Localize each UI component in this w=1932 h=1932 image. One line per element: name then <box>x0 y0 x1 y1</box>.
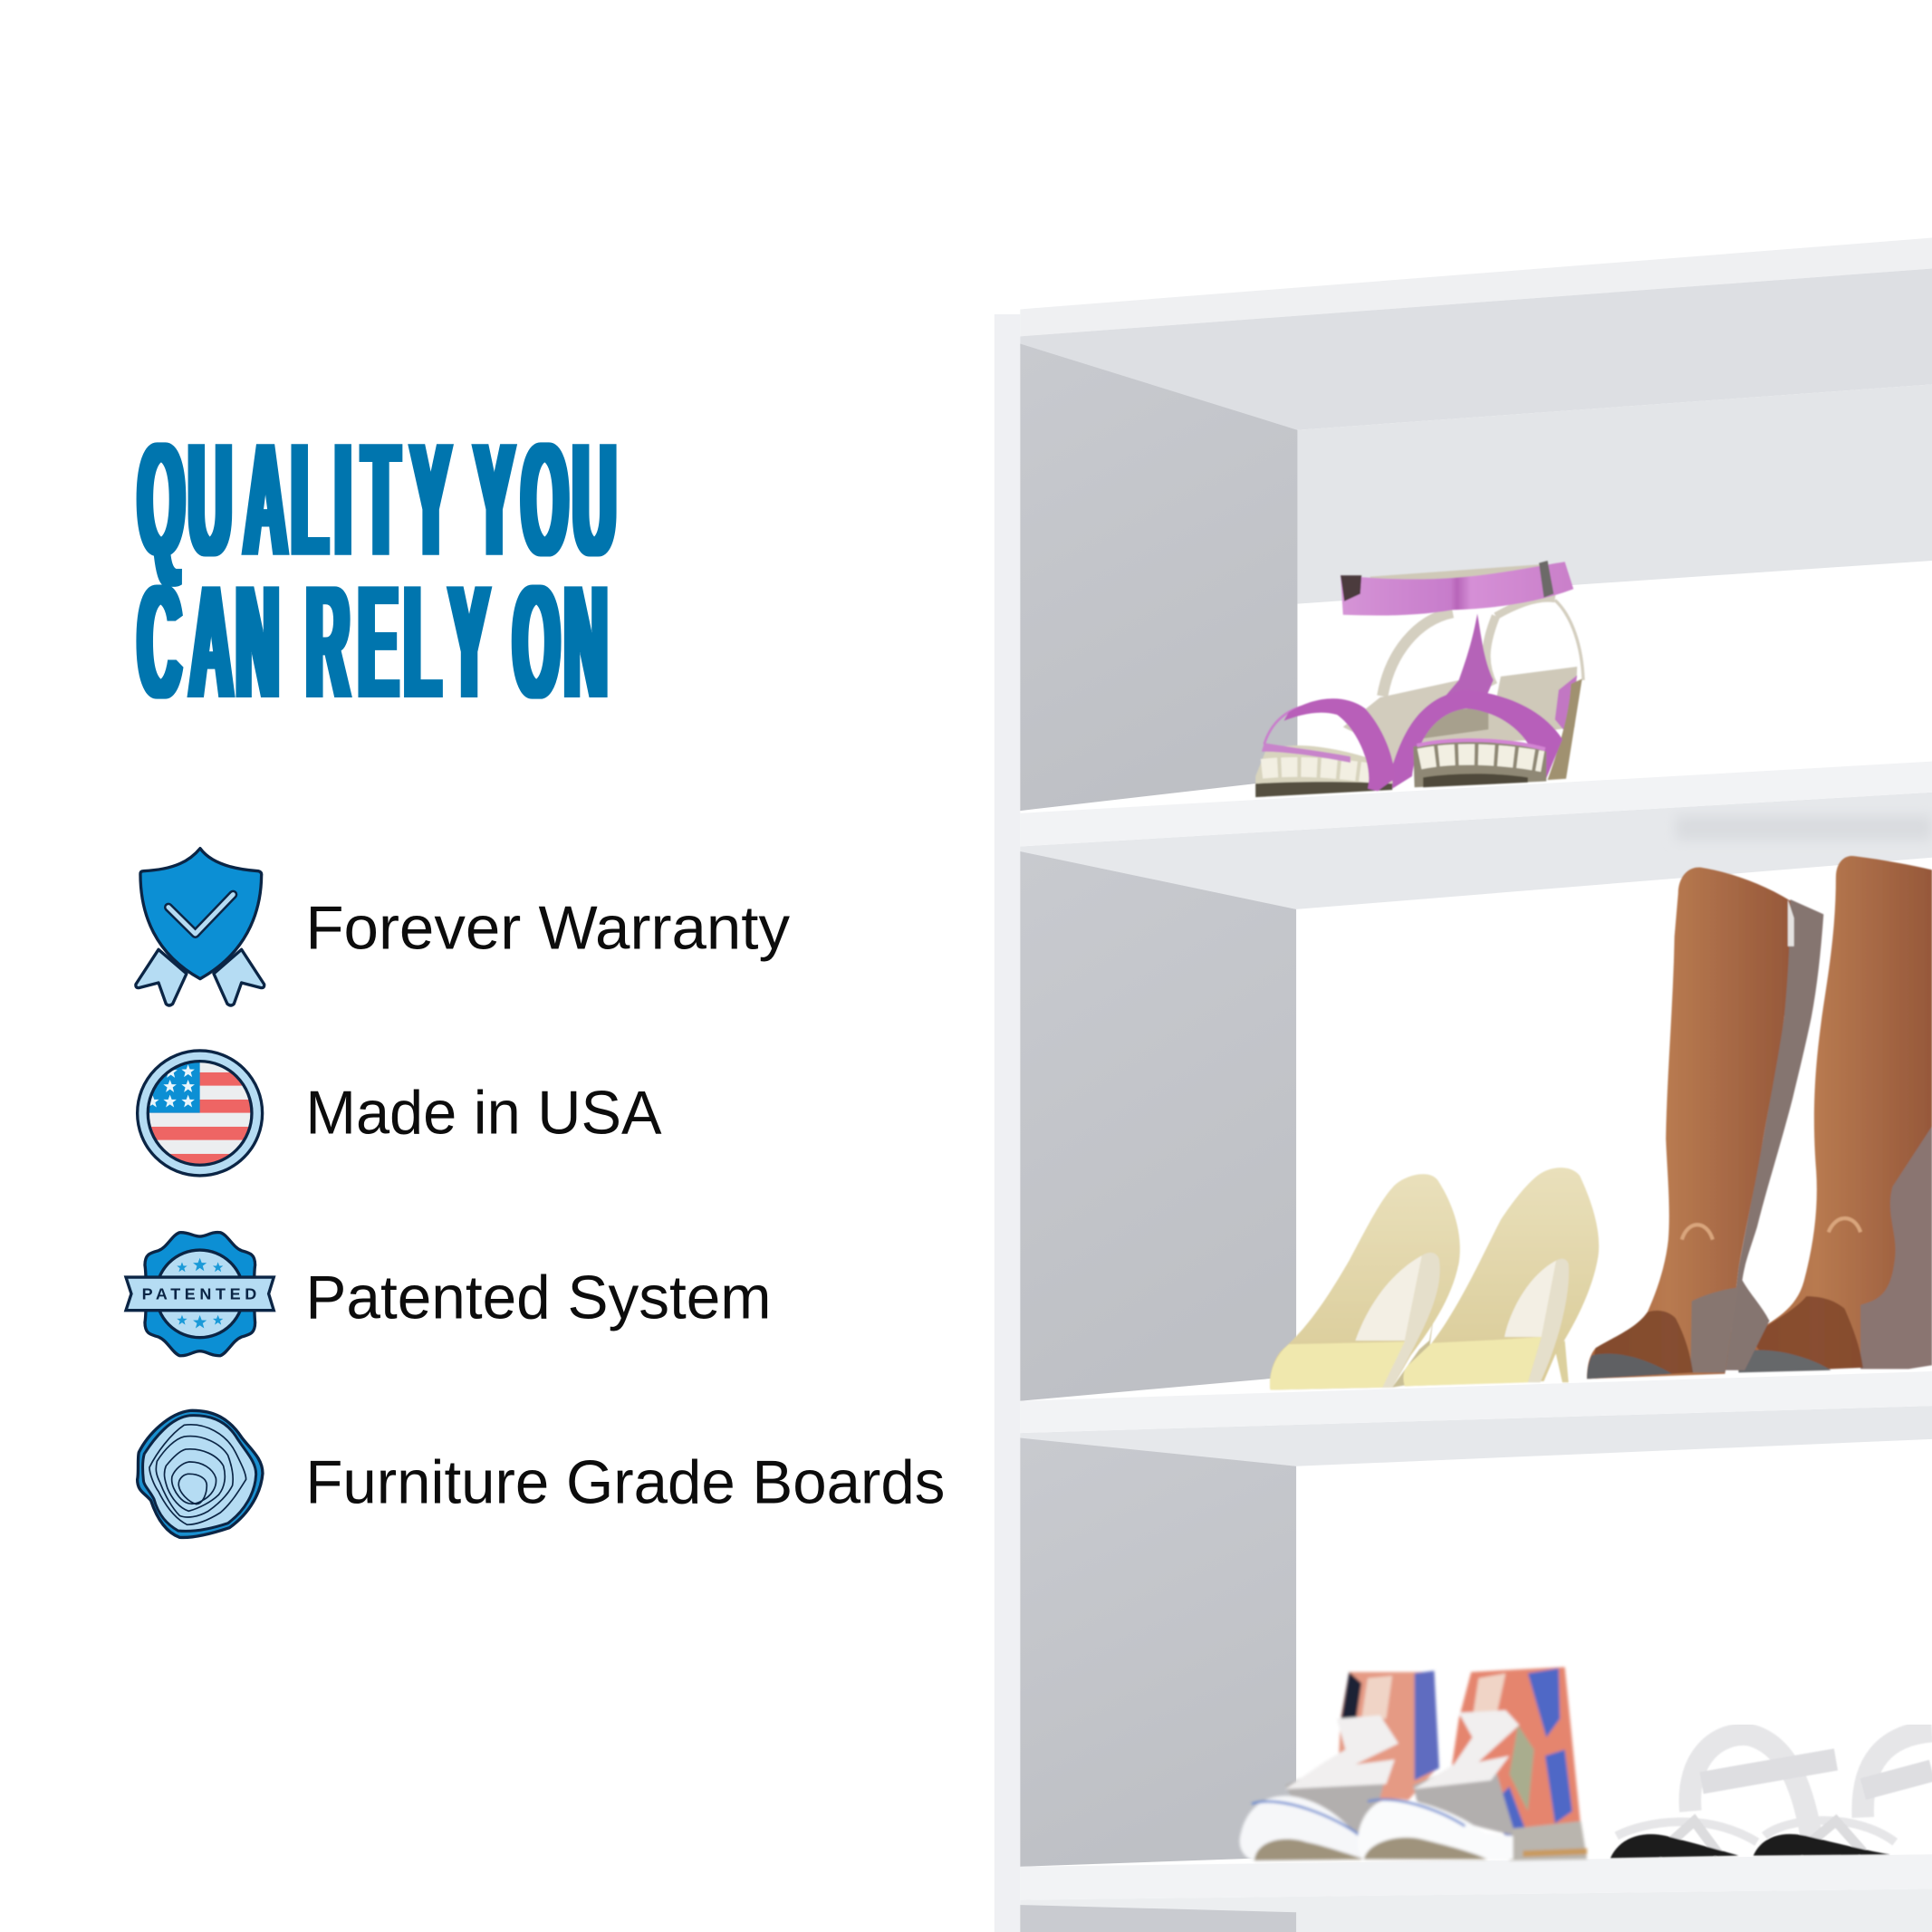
shelf 2 underside <box>1020 1406 1932 1466</box>
shelf 3 front face <box>1020 1854 1932 1900</box>
text: Furniture Grade Boards: Furniture Grade Boards <box>305 1448 945 1517</box>
shelf 2 front face <box>1020 1371 1932 1433</box>
shelf 1 front face <box>1020 762 1932 847</box>
top board front face <box>1020 238 1932 336</box>
shelf 1 underside <box>1020 793 1932 909</box>
text: Patented System: Patented System <box>305 1264 772 1332</box>
icon: patented seal: PATENTED <box>142 1284 256 1302</box>
title <box>138 409 616 732</box>
side wall top compartment <box>1020 344 1297 811</box>
top board underside <box>1020 269 1932 430</box>
text: Made in USA: Made in USA <box>305 1079 662 1148</box>
icon: shield warranty <box>136 849 264 1005</box>
image: pink wedge sandals <box>1255 561 1583 797</box>
shelf 1 reflection <box>1678 818 1929 839</box>
image: white strap sandals <box>1610 1731 1932 1858</box>
image: brown knee-high boots <box>1587 856 1932 1379</box>
title: CAN RELY ON <box>138 552 608 732</box>
side wall lower compartment <box>1020 1438 1296 1867</box>
side wall middle compartment <box>1020 851 1296 1401</box>
icon: american flag badge <box>138 1051 263 1176</box>
image: patterned high-top sneakers <box>1240 1668 1587 1861</box>
image: cream stiletto pumps <box>1270 1168 1599 1389</box>
side wall below shelf 3 <box>1020 1905 1296 1932</box>
shelf 3 underside <box>1020 1889 1932 1932</box>
icon: wood rings <box>138 1410 263 1537</box>
top compartment back wall <box>1297 384 1932 604</box>
icon: patented seal <box>126 1233 274 1356</box>
panel: shoe shelf unit <box>995 238 1932 1932</box>
text: Forever Warranty: Forever Warranty <box>305 893 790 962</box>
title: QUALITY YOU <box>138 409 616 590</box>
shelf frame left edge <box>995 314 1020 1932</box>
